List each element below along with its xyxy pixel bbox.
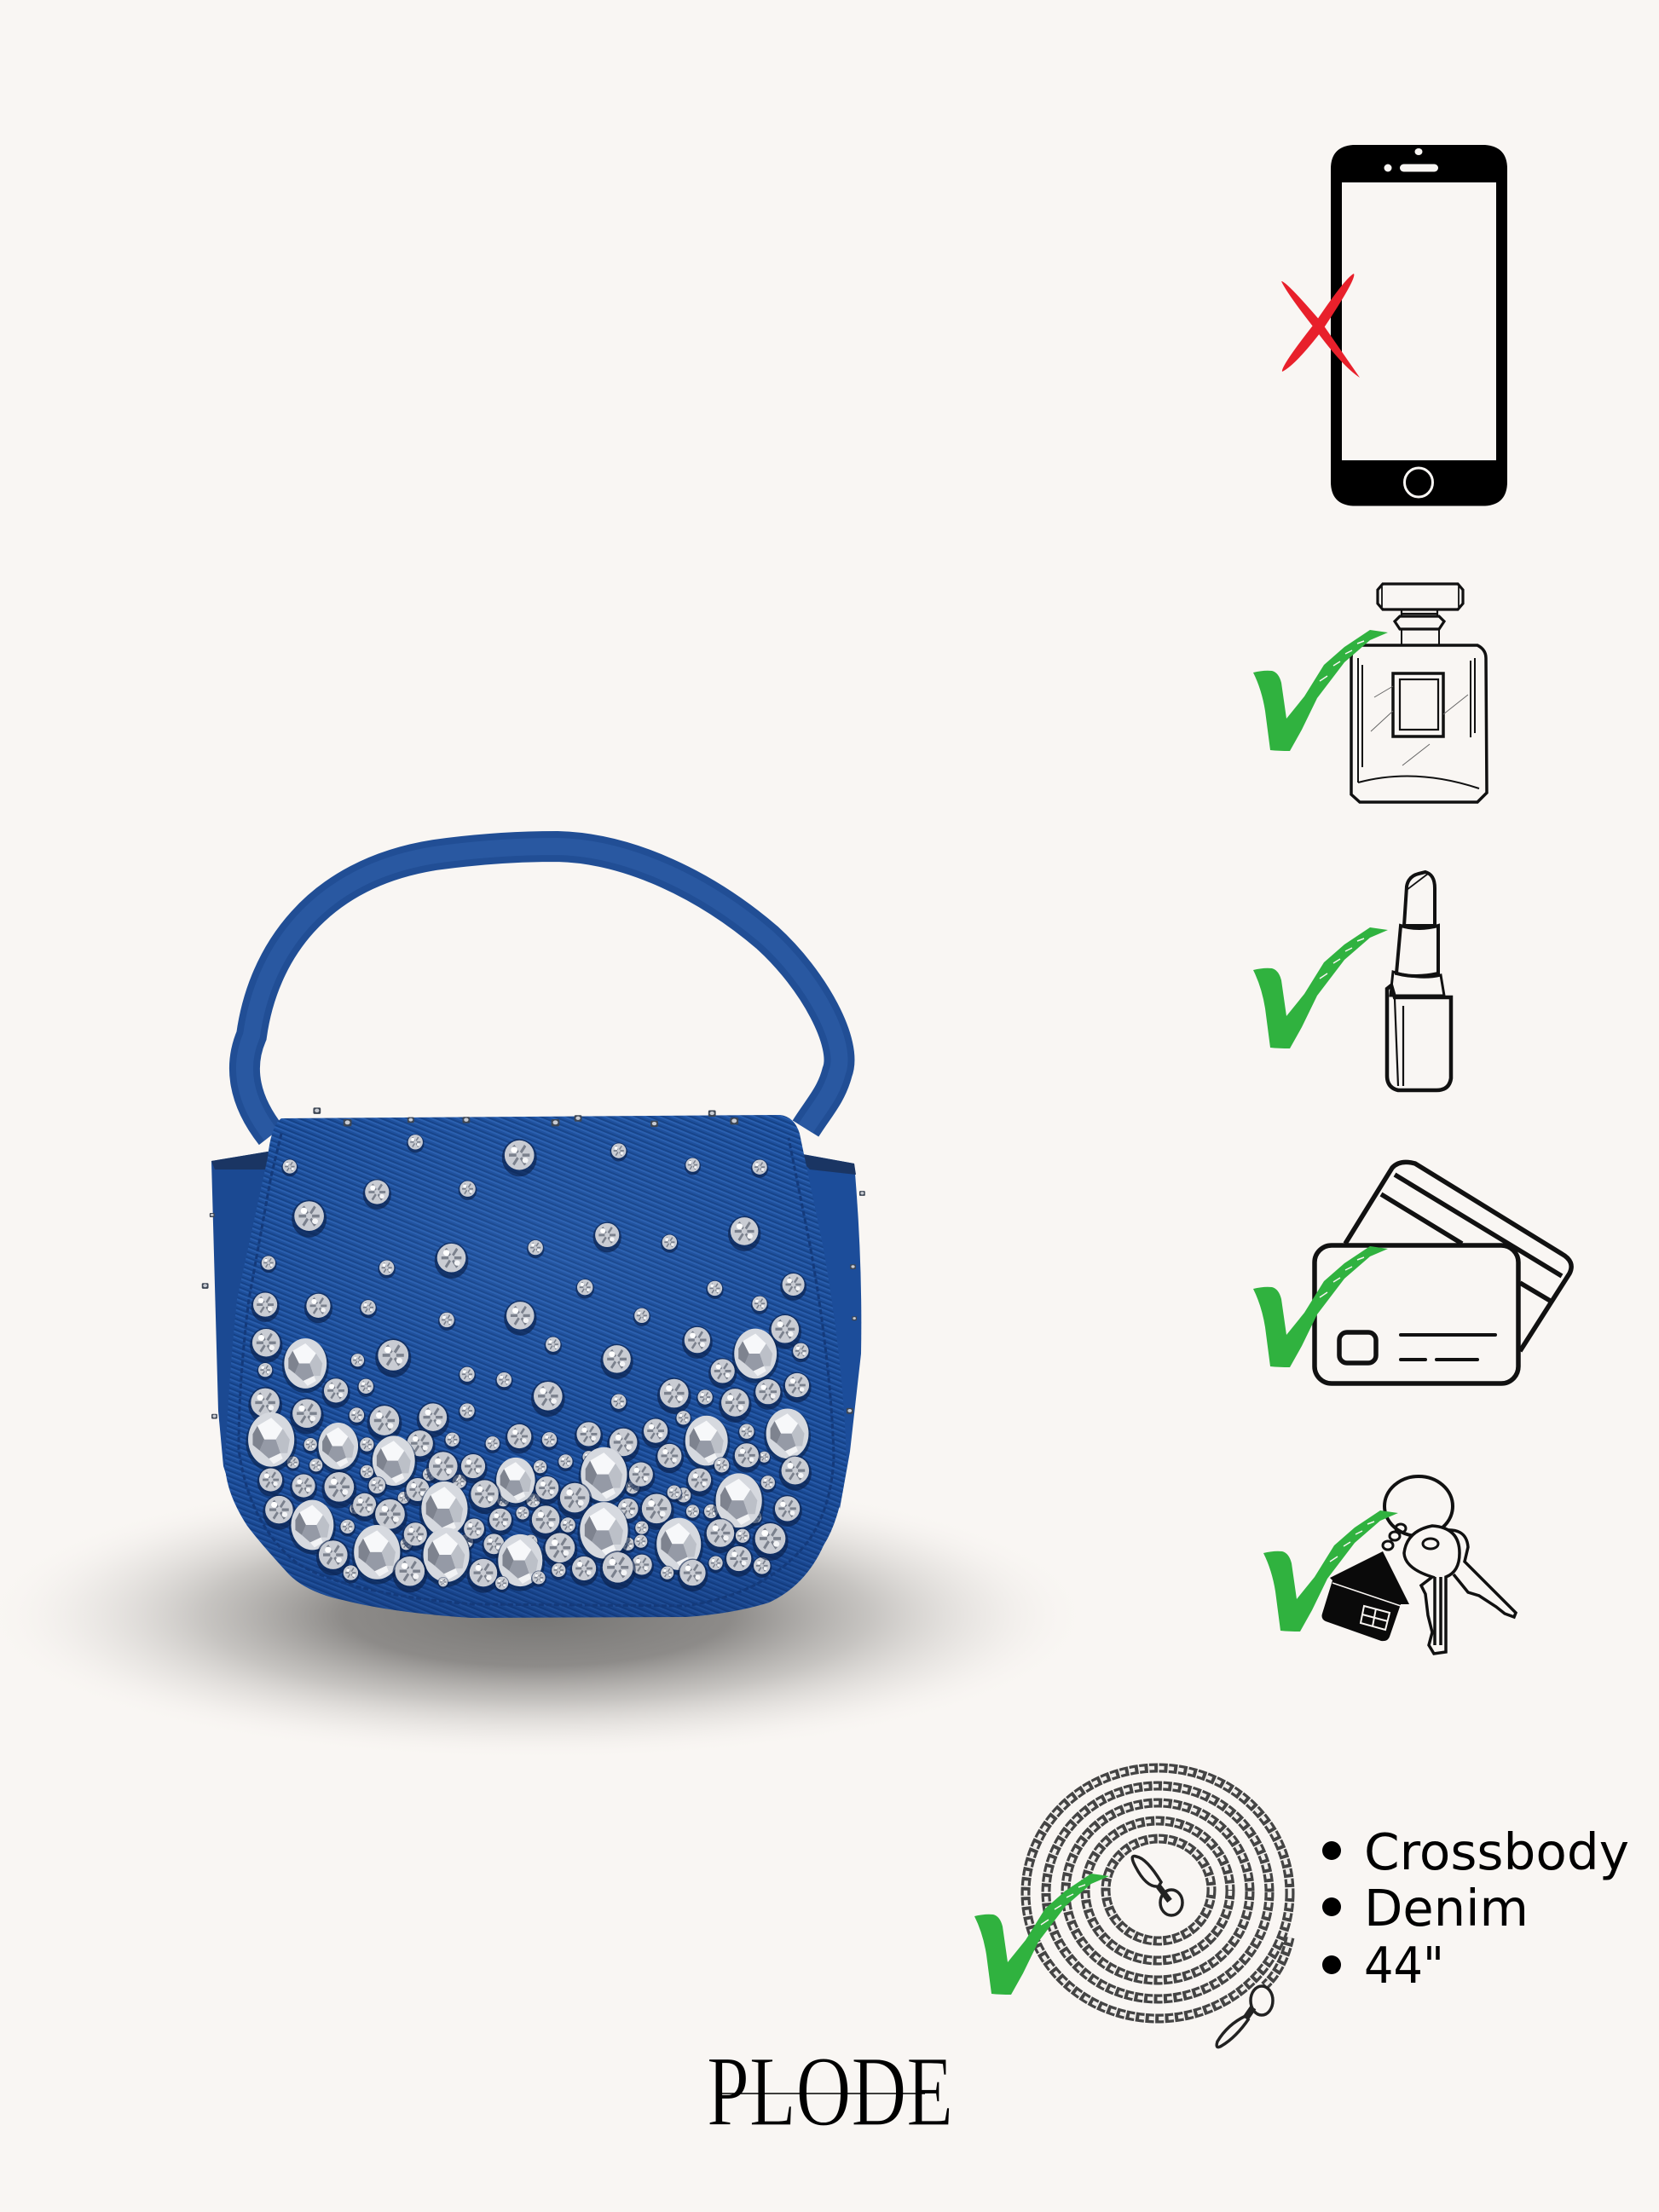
product: denim crystal bag <box>202 846 865 1618</box>
icon: lipstick with check <box>1253 872 1451 1090</box>
back card <box>1345 1162 1571 1351</box>
bullet: denim: Denim <box>1364 1879 1529 1938</box>
phone body <box>1331 145 1507 506</box>
bag flap <box>225 1115 847 1618</box>
check mark <box>974 1874 1109 1995</box>
bullet: length <box>1322 1936 1444 1995</box>
bag side panels <box>211 1151 861 1509</box>
icon: phone (not allowed) <box>1281 145 1507 506</box>
inner clasp <box>1132 1857 1182 1915</box>
feature list <box>1322 1822 1629 1995</box>
chain tail <box>1264 1938 1290 1986</box>
lipstick <box>1387 872 1451 1090</box>
front card <box>1315 1245 1518 1383</box>
bag shadow <box>0 1470 1091 1760</box>
icon: credit cards with check <box>1253 1162 1571 1383</box>
front key <box>1404 1526 1460 1654</box>
key ring <box>1384 1476 1453 1536</box>
back key <box>1439 1530 1516 1617</box>
check mark <box>1253 1246 1388 1367</box>
perfume bottle <box>1351 584 1487 802</box>
check mark <box>1253 630 1388 751</box>
icon: crossbody chain strap with check <box>974 1768 1290 2047</box>
logo: PLODE: PLODE <box>707 2036 953 2147</box>
icon: keys with house keychain and check <box>1263 1476 1516 1654</box>
bullet: crossbody: Crossbody <box>1364 1822 1629 1881</box>
bullet: length: 44" <box>1364 1936 1444 1995</box>
check mark <box>1253 927 1388 1048</box>
house keychain <box>1321 1551 1409 1641</box>
bag handle <box>245 846 839 1135</box>
icon: red cross <box>1281 274 1360 378</box>
icon: perfume bottle with check <box>1253 584 1487 802</box>
crystals <box>202 1107 865 1593</box>
outer clasp <box>1217 1986 1273 2047</box>
keychain links <box>1383 1524 1406 1550</box>
check mark <box>1263 1510 1398 1632</box>
coiled chain <box>1026 1768 1290 2019</box>
